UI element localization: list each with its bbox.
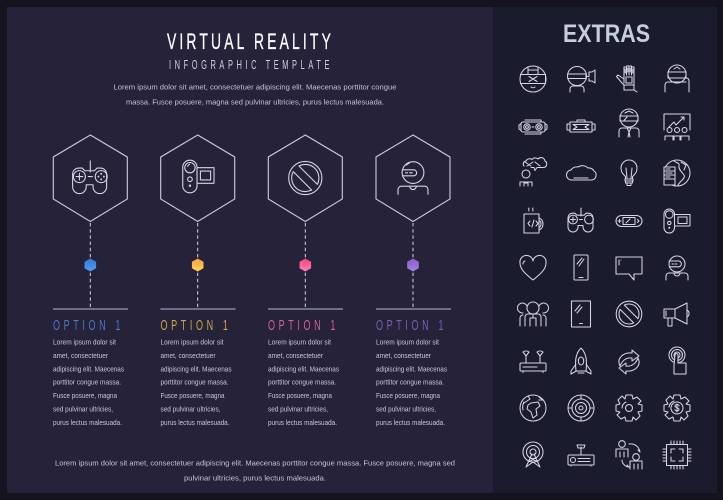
icon: processor chip — [663, 441, 691, 469]
icon: team — [517, 302, 549, 326]
icon: cloud — [566, 166, 596, 180]
option text 3: amet, consectetuer — [268, 351, 324, 360]
icon: businessman with visor — [619, 109, 639, 137]
icon: earth — [520, 395, 546, 421]
rule 2 — [160, 308, 236, 310]
intro text: massa. Fusce posuere, magna sed pulvinar ultricies, purus lectus malesuada. — [126, 98, 384, 106]
option text 4: Lorem ipsum dolor sit — [376, 338, 439, 346]
option text 2 — [160, 338, 232, 427]
hexagon frame 3 — [268, 135, 342, 222]
option text 2: sed pulvinar ultricies, — [160, 404, 220, 414]
icon: rocket — [571, 348, 591, 374]
connector 2 — [197, 223, 199, 309]
marker dot 2 — [192, 258, 204, 271]
icon: VR glove — [616, 66, 637, 92]
icon: VR goggles front — [519, 120, 547, 134]
icon: touch button — [669, 347, 686, 374]
icon: megaphone — [664, 303, 689, 326]
option text 2: Fusce posuere, magna — [160, 391, 225, 400]
option text 2: adipiscing elit. Maecenas — [160, 364, 232, 374]
rule 1 — [53, 308, 128, 310]
icon: radio tower — [523, 442, 543, 467]
panel: extras background — [493, 7, 717, 493]
icon: presentation chart — [664, 114, 690, 140]
hexagon frame 2 — [161, 135, 235, 222]
option text 4: sed pulvinar ultricies, — [376, 404, 436, 414]
footer text — [55, 458, 455, 482]
icon: person with headset — [666, 256, 688, 280]
icon: gear — [616, 395, 642, 421]
option column 2: camcorder — [160, 135, 236, 427]
icon: headset side view — [568, 66, 595, 92]
icon: target — [568, 395, 594, 421]
icon: prohibited — [616, 301, 642, 327]
option text 3 — [268, 338, 339, 427]
option text 1: sed pulvinar ultricies, — [53, 404, 113, 414]
option text 1: amet, consectetuer — [53, 351, 109, 360]
option text 2: purus lectus malesuada. — [160, 418, 230, 427]
icon: person with idea cloud — [520, 158, 547, 186]
option text 2: Lorem ipsum dolor sit — [160, 338, 224, 346]
option text 3: Lorem ipsum dolor sit — [268, 338, 331, 346]
option heading 1: OPTION 1 — [53, 317, 124, 334]
icon: projector — [568, 445, 594, 466]
option text 1 — [53, 338, 124, 427]
option heading 4: OPTION 1 — [376, 317, 447, 334]
marker dot 1 — [84, 258, 96, 271]
footer text: pulvinar ultricies, purus lectus malesuada. — [184, 474, 326, 482]
option text 4: porttitor congue massa. — [376, 378, 444, 386]
icon: person with headset — [398, 162, 428, 194]
option text 1: adipiscing elit. Maecenas — [53, 364, 124, 374]
option text 4: adipiscing elit. Maecenas — [376, 364, 447, 374]
icon: VR goggles flat — [567, 120, 595, 132]
icon: coffee mug with code — [524, 208, 543, 233]
option column 3: prohibition sign — [268, 135, 343, 427]
icon: game controller — [568, 208, 593, 232]
intro text — [114, 82, 396, 106]
option heading 2: OPTION 1 — [160, 317, 232, 334]
panel: main infographic background — [7, 7, 493, 493]
icon: game controller — [73, 161, 107, 194]
title: VIRTUAL REALITY — [167, 29, 334, 54]
rule 3 — [268, 308, 343, 310]
connector 3 — [304, 223, 306, 309]
icon: light bulb — [621, 160, 637, 186]
icon: handheld console — [616, 216, 642, 226]
marker dot 4 — [407, 258, 419, 271]
intro text: Lorem ipsum dolor sit amet, consectetuer adipiscing elit. Maecenas porttitor congue — [114, 82, 396, 92]
hexagon frame 1 — [53, 135, 127, 222]
option text 1: Fusce posuere, magna — [53, 391, 117, 400]
icon: wifi router — [520, 351, 546, 372]
footer text: Lorem ipsum dolor sit amet, consectetuer adipiscing elit. Maecenas porttitor congue massa. Fusce posuere, magna sed — [55, 458, 455, 468]
icon: tablet — [572, 301, 590, 327]
option heading 3: OPTION 1 — [268, 317, 339, 334]
icon: camcorder — [664, 209, 690, 233]
rule 4 — [376, 308, 451, 310]
icon: dollar gear — [664, 395, 690, 421]
hexagon frame 4 — [376, 135, 450, 222]
icon: camcorder — [183, 160, 214, 193]
icon: sync arrows — [619, 350, 639, 374]
icon: speech bubble — [616, 257, 642, 280]
extras icon grid — [517, 65, 691, 469]
marker dot 3 — [300, 258, 311, 271]
option text 1: porttitor congue massa. — [53, 378, 121, 386]
option text 4: purus lectus malesuada. — [376, 418, 445, 427]
option column 1: gamepad — [53, 135, 128, 427]
icon: smartphone — [574, 255, 588, 280]
option text 3: Fusce posuere, magna — [268, 391, 332, 400]
icon: globe with server — [664, 160, 690, 186]
option text 2: amet, consectetuer — [160, 351, 216, 360]
option text 4: Fusce posuere, magna — [376, 391, 440, 400]
extras heading: EXTRAS — [563, 20, 650, 48]
icon: user with visor — [665, 65, 689, 92]
connector 4 — [412, 223, 414, 309]
option text 3: sed pulvinar ultricies, — [268, 404, 328, 414]
option text 4 — [376, 338, 447, 427]
connector 1 — [89, 223, 91, 309]
option text 2: porttitor congue massa. — [160, 378, 229, 386]
option text 1: Lorem ipsum dolor sit — [53, 338, 116, 346]
option text 3: adipiscing elit. Maecenas — [268, 364, 339, 374]
icon: heart — [520, 255, 546, 280]
subtitle: INFOGRAPHIC TEMPLATE — [169, 58, 333, 72]
option text 3: porttitor congue massa. — [268, 378, 336, 386]
option column 4: VR user — [376, 135, 451, 427]
option text 4: amet, consectetuer — [376, 351, 432, 360]
icon: prohibited — [289, 161, 322, 195]
option text 3: purus lectus malesuada. — [268, 418, 337, 427]
icon: people exchange — [616, 441, 642, 469]
icon: VR face — [520, 66, 546, 92]
option text 1: purus lectus malesuada. — [53, 418, 122, 427]
